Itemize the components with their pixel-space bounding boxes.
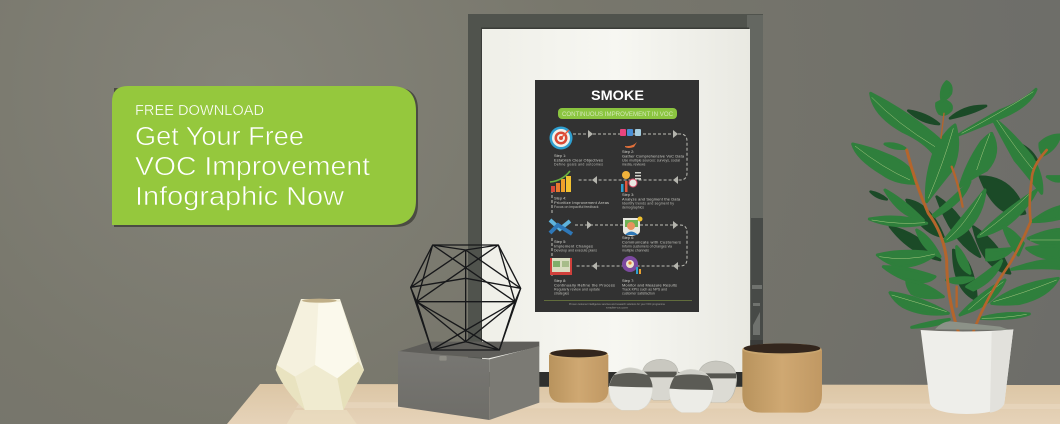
dashed process path bbox=[552, 134, 687, 276]
icon: customer badge bbox=[623, 216, 642, 236]
step 3 text bbox=[622, 192, 681, 210]
step 6 text: Step 6: bbox=[622, 235, 634, 240]
faceted cream vase bbox=[276, 299, 364, 424]
step 8 text: strategies bbox=[554, 292, 569, 296]
glass candle holders bbox=[609, 359, 737, 412]
poster logo: SMOKE bbox=[591, 88, 644, 103]
dark back leaves bbox=[871, 106, 1037, 300]
picture frame bbox=[468, 14, 763, 387]
icon: open book bbox=[550, 258, 572, 275]
headline: Get Your Free bbox=[135, 123, 304, 151]
icon: crossing arrows bbox=[550, 220, 572, 234]
step 5 text: Step 5: bbox=[554, 239, 566, 244]
step 6 text bbox=[622, 235, 681, 252]
step 2 text: Use multiple sources: surveys, social bbox=[622, 158, 680, 162]
eyebrow: FREE DOWNLOAD bbox=[135, 103, 264, 119]
step 3 text: Identify trends and segment by bbox=[622, 202, 674, 206]
icon: target bbox=[550, 126, 572, 150]
step 1 text bbox=[554, 153, 603, 166]
poster footer: smoke-cx.com bbox=[606, 306, 629, 310]
step 6 text: multiple channels bbox=[622, 248, 649, 252]
step 7 text bbox=[622, 278, 677, 296]
step 2 text bbox=[622, 149, 685, 166]
step 2 text: media, reviews bbox=[622, 162, 646, 166]
step 2 text: Gather Comprehensive VoC Data bbox=[622, 154, 685, 158]
step 1 text: Establish Clear Objectives bbox=[554, 158, 603, 162]
wooden shelf bbox=[227, 384, 1060, 424]
poster footer: Proven customer intelligence services and research solutions for your VOC programme bbox=[569, 302, 665, 306]
step 1 text: Step 1: bbox=[554, 153, 566, 158]
step 5 text: Develop and execute plans bbox=[554, 248, 597, 252]
light leaf veins bbox=[855, 92, 1060, 318]
step 4 text: Step 4: bbox=[554, 196, 566, 200]
step 6 text: Inform customers of changes via bbox=[622, 244, 672, 248]
step 3 text: Step 3: bbox=[622, 192, 634, 197]
poster bbox=[535, 80, 699, 312]
left woven mug bbox=[549, 349, 608, 403]
step 7 text: Monitor and Measure Results bbox=[622, 282, 677, 288]
step 6 text: Communicate with Customers bbox=[622, 240, 681, 244]
concrete box bbox=[398, 342, 539, 420]
potted plant bbox=[853, 82, 1060, 414]
poster title pill bbox=[558, 108, 677, 119]
poster footer bbox=[569, 302, 665, 310]
icon: data sources bbox=[620, 129, 641, 148]
step 8 text bbox=[554, 278, 615, 296]
step 4 text: Focus on impactful feedback bbox=[554, 205, 599, 209]
headline: Infographic Now bbox=[135, 183, 345, 211]
step 4 text: Prioritize Improvement Areas bbox=[554, 200, 609, 205]
step 5 text: Implement Changes bbox=[554, 244, 593, 248]
headline bbox=[135, 123, 370, 211]
icon: gear with gauge bbox=[622, 256, 641, 274]
icon: analytics bbox=[621, 171, 641, 192]
step 7 text: Step 7: bbox=[622, 278, 634, 283]
step 7 text: Track KPIs such as NPS and bbox=[622, 288, 667, 292]
wire cage sculpture bbox=[411, 245, 521, 350]
step 4 text bbox=[554, 196, 609, 209]
step 3 text: demographics bbox=[622, 206, 644, 210]
headline: VOC Improvement bbox=[135, 153, 370, 181]
path arrowheads bbox=[587, 130, 678, 270]
step 5 text bbox=[554, 239, 597, 252]
step 2 text: Step 2: bbox=[622, 149, 634, 154]
white ceramic pot bbox=[921, 321, 1013, 414]
step 8 text: Step 8: bbox=[554, 278, 566, 283]
orange stems bbox=[907, 113, 1047, 332]
step 8 text: Regularly review and update bbox=[554, 288, 600, 292]
poster title pill: CONTINUOUS IMPROVEMENT IN VOC bbox=[562, 112, 674, 118]
step 8 text: Continually Refine the Process bbox=[554, 282, 615, 288]
call to action box bbox=[112, 86, 418, 227]
step 7 text: customer satisfaction bbox=[622, 292, 655, 296]
step 1 text: Define goals and outcomes bbox=[554, 162, 603, 166]
right woven mug bbox=[742, 343, 822, 413]
mid green leaves bbox=[853, 82, 1060, 327]
step 3 text: Analyze and Segment the Data bbox=[622, 196, 681, 202]
icon: growth bars bbox=[550, 171, 571, 192]
